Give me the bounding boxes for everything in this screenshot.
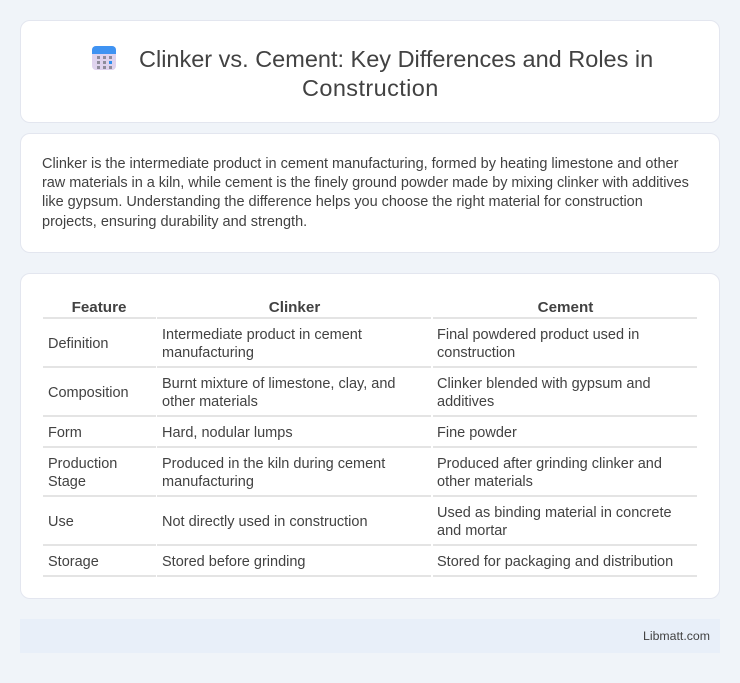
icon: calendar xyxy=(92,46,116,70)
row: use xyxy=(48,505,672,539)
title: Construction xyxy=(302,75,439,101)
row: storage: Stored for packaging and distribution xyxy=(437,554,673,570)
footer bar xyxy=(20,619,720,653)
table header: Clinker xyxy=(269,299,320,316)
row: storage xyxy=(48,554,673,570)
intro card xyxy=(20,133,720,253)
table card xyxy=(20,273,720,599)
row: definition: Final powdered product used in xyxy=(437,327,639,343)
row: composition: other materials xyxy=(162,394,258,410)
footer source text: Libmatt.com xyxy=(643,629,710,643)
intro text xyxy=(42,156,689,230)
row: storage: Storage xyxy=(48,554,99,570)
row: form xyxy=(48,425,517,441)
row: definition: manufacturing xyxy=(162,345,254,361)
row: production stage: Stage xyxy=(48,474,86,490)
row: composition: Clinker blended with gypsum and xyxy=(437,376,651,392)
row: composition: Composition xyxy=(48,385,129,401)
row: definition xyxy=(48,327,639,361)
row: composition: additives xyxy=(437,394,494,410)
title: Clinker vs. Cement: Key Differences and Roles in xyxy=(139,46,653,72)
row: definition: construction xyxy=(437,345,515,361)
row: use: and mortar xyxy=(437,523,507,539)
row: use: Use xyxy=(48,514,74,530)
table header: Feature xyxy=(72,299,126,316)
header card xyxy=(20,20,720,123)
row: form: Fine powder xyxy=(437,425,517,441)
table header xyxy=(72,299,594,316)
comparison table xyxy=(43,299,697,577)
row: production stage: manufacturing xyxy=(162,474,254,490)
row: production stage: Produced after grinding clinker and xyxy=(437,456,662,472)
row: storage: Stored before grinding xyxy=(162,554,306,570)
row: form: Form xyxy=(48,425,82,441)
intro text: raw materials in a kiln, while cement is the finely ground powder made by mixing clinker with additives xyxy=(42,175,689,191)
row: use: Used as binding material in concrete xyxy=(437,505,672,521)
intro text: like gypsum. Understanding the difference helps you choose the right material for construction xyxy=(42,194,643,210)
intro text: Clinker is the intermediate product in cement manufacturing, formed by heating limestone and other xyxy=(42,156,678,172)
table header: Cement xyxy=(538,299,593,316)
row: use: Not directly used in construction xyxy=(162,514,368,530)
row: form: Hard, nodular lumps xyxy=(162,425,293,441)
intro text: projects, ensuring durability and strength. xyxy=(42,214,307,230)
row: definition: Definition xyxy=(48,336,108,352)
row: production stage: Production xyxy=(48,456,117,472)
row: production stage: Produced in the kiln during cement xyxy=(162,456,385,472)
row: production stage: other materials xyxy=(437,474,533,490)
title xyxy=(139,46,653,101)
row: composition xyxy=(48,376,651,410)
row: production stage xyxy=(48,456,662,490)
row: composition: Burnt mixture of limestone, clay, and xyxy=(162,376,395,392)
row: definition: Intermediate product in cement xyxy=(162,327,362,343)
